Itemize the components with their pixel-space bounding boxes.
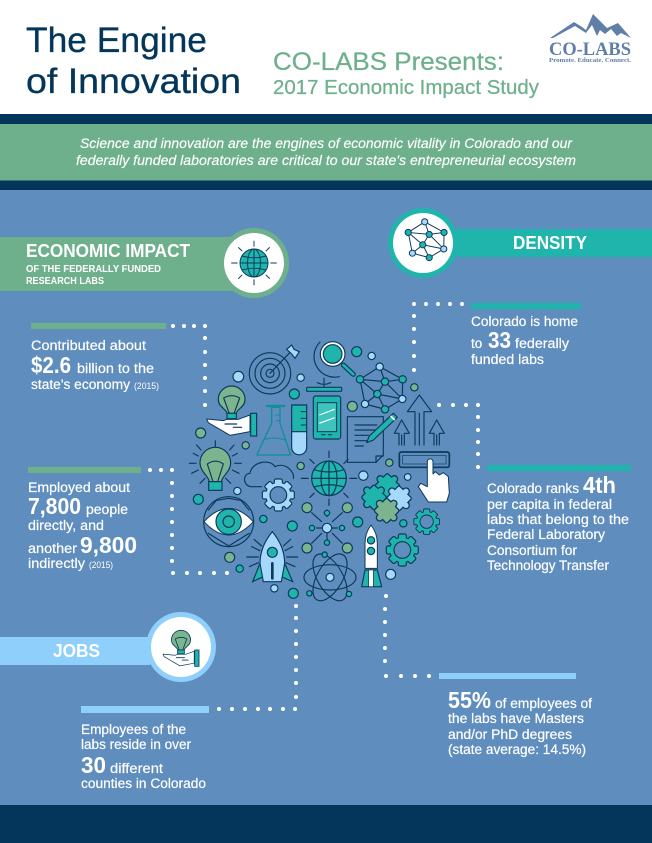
stat: contributed 2.6 billion: [31, 323, 166, 392]
stat: employed 7,800: another: [28, 541, 78, 556]
stat: 30 counties: different: [110, 761, 163, 776]
intro banner: [0, 114, 652, 190]
icon: globe: [232, 241, 276, 285]
subtitle: 2017 Economic Impact Study: [273, 76, 540, 99]
central illustration: [189, 342, 449, 606]
icon: radial nodes: [302, 503, 352, 553]
stat: employed 7,800: 9,800: [80, 532, 137, 558]
heading: density: DENSITY: [513, 233, 587, 253]
icon: large teal gear: [386, 534, 418, 566]
icon: eye in globe: [204, 497, 254, 547]
subheading: OF THE FEDERALLY FUNDED: [26, 263, 161, 275]
subheading: [26, 263, 161, 287]
stat: contributed 2.6 billion: billion to the: [77, 361, 154, 376]
stat: ranks 4th: labs that belong to the: [487, 512, 629, 527]
logo: CO-LABS: [549, 14, 632, 64]
icon: network: [405, 219, 447, 261]
icon: growth arrows: [394, 395, 444, 445]
section header: jobs: [0, 612, 216, 682]
icon: atom: [304, 548, 356, 606]
stat: 33 labs: 33: [488, 327, 511, 353]
subtitle: CO-LABS Presents:: [273, 48, 504, 76]
stat: 55 percent: and/or PhD degrees: [448, 727, 572, 742]
icon: network: [356, 363, 406, 413]
stat: employed 7,800: [28, 467, 141, 571]
stat: ranks 4th: [487, 465, 631, 573]
intro text: federally funded laboratories are critical to our state's entrepreneurial ecosystem: [76, 153, 576, 168]
heading: jobs: JOBS: [53, 641, 100, 661]
stat: employed 7,800: indirectly: [28, 556, 85, 571]
stat: 30 counties: 30: [81, 752, 106, 778]
stat: ranks 4th: 4th: [583, 472, 616, 498]
stat: 30 counties: counties in Colorado: [81, 776, 206, 791]
logo: CO-LABS: CO-LABS: [549, 39, 631, 60]
title: [26, 21, 241, 101]
section header: density: [388, 208, 652, 278]
icon: cloud: [245, 462, 294, 487]
heading: economic impact: ECONOMIC IMPACT: [26, 240, 191, 261]
subheading: RESEARCH LABS: [26, 275, 104, 287]
stat: 55 percent: 55%: [448, 687, 491, 713]
stat: ranks 4th: Colorado ranks: [487, 481, 579, 496]
header panel: [0, 0, 652, 114]
icon: target: [249, 345, 299, 394]
title: The Engine: [26, 21, 207, 60]
decorative dots: [193, 347, 418, 598]
stat: employed 7,800: (2015): [89, 560, 113, 571]
intro text: [76, 136, 576, 168]
logo: CO-LABS: Promote. Educate. Connect.: [549, 58, 632, 64]
icon: document and pencil: [347, 413, 397, 462]
icon: globe: [301, 451, 357, 505]
footer bar: [0, 805, 652, 843]
section header: economic impact: [0, 228, 289, 298]
stat: contributed 2.6 billion: (2015): [134, 381, 159, 392]
stat: ranks 4th: Consortium for: [487, 543, 578, 558]
icon: bulb in hand: [207, 386, 257, 436]
stat: contributed 2.6 billion: state's economy: [31, 377, 130, 392]
title: of Innovation: [26, 62, 241, 101]
stat: ranks 4th: Technology Transfer: [487, 558, 609, 573]
stat: 55 percent: the labs have Masters: [448, 711, 584, 726]
stat: 55 percent: (state average: 14.5%): [448, 742, 586, 757]
icon: light gear: [262, 479, 294, 511]
stat: 33 labs: [471, 303, 581, 367]
icon: bulb in hand: [163, 630, 199, 666]
stat: 55 percent: of employees of: [495, 696, 592, 711]
stat: employed 7,800: people: [86, 502, 128, 517]
icon: flask: [257, 406, 291, 455]
stat: 33 labs: funded labs: [471, 352, 544, 367]
intro text: Science and innovation are the engines of economic vitality in Colorado and our: [80, 136, 573, 151]
stat: 33 labs: federally: [515, 336, 569, 351]
stat: 33 labs: to: [471, 336, 482, 351]
icon: small teal gear: [414, 509, 439, 534]
stat: employed 7,800: directly, and: [28, 518, 104, 533]
icon: puzzle: [355, 467, 418, 529]
stat: employed 7,800: Employed about: [28, 480, 130, 495]
icon: desk globe and magnifier: [307, 342, 353, 391]
icon: light rocket: [247, 532, 298, 582]
dotted connectors: [148, 302, 480, 711]
stat: 30 counties: labs reside in over: [81, 737, 191, 752]
icon: white rocket: [362, 525, 382, 587]
stat: 33 labs: Colorado is home: [471, 314, 578, 329]
stat: contributed 2.6 billion: $2.6: [31, 352, 71, 378]
stat: 30 counties: [81, 706, 209, 791]
stat: contributed 2.6 billion: Contributed about: [31, 338, 146, 353]
stat: 55 percent: [439, 673, 592, 757]
stat: ranks 4th: per capita in federal: [487, 497, 612, 512]
icon: button and pointer hand: [399, 452, 449, 502]
stat: employed 7,800: 7,800: [28, 493, 81, 519]
icon: bulb: [189, 441, 241, 490]
stat: ranks 4th: Federal Laboratory: [487, 527, 605, 542]
icon: smartphone: [313, 396, 341, 439]
stat: 30 counties: Employees of the: [81, 722, 186, 737]
subtitle: [273, 48, 540, 99]
icon: test tube: [292, 405, 307, 455]
